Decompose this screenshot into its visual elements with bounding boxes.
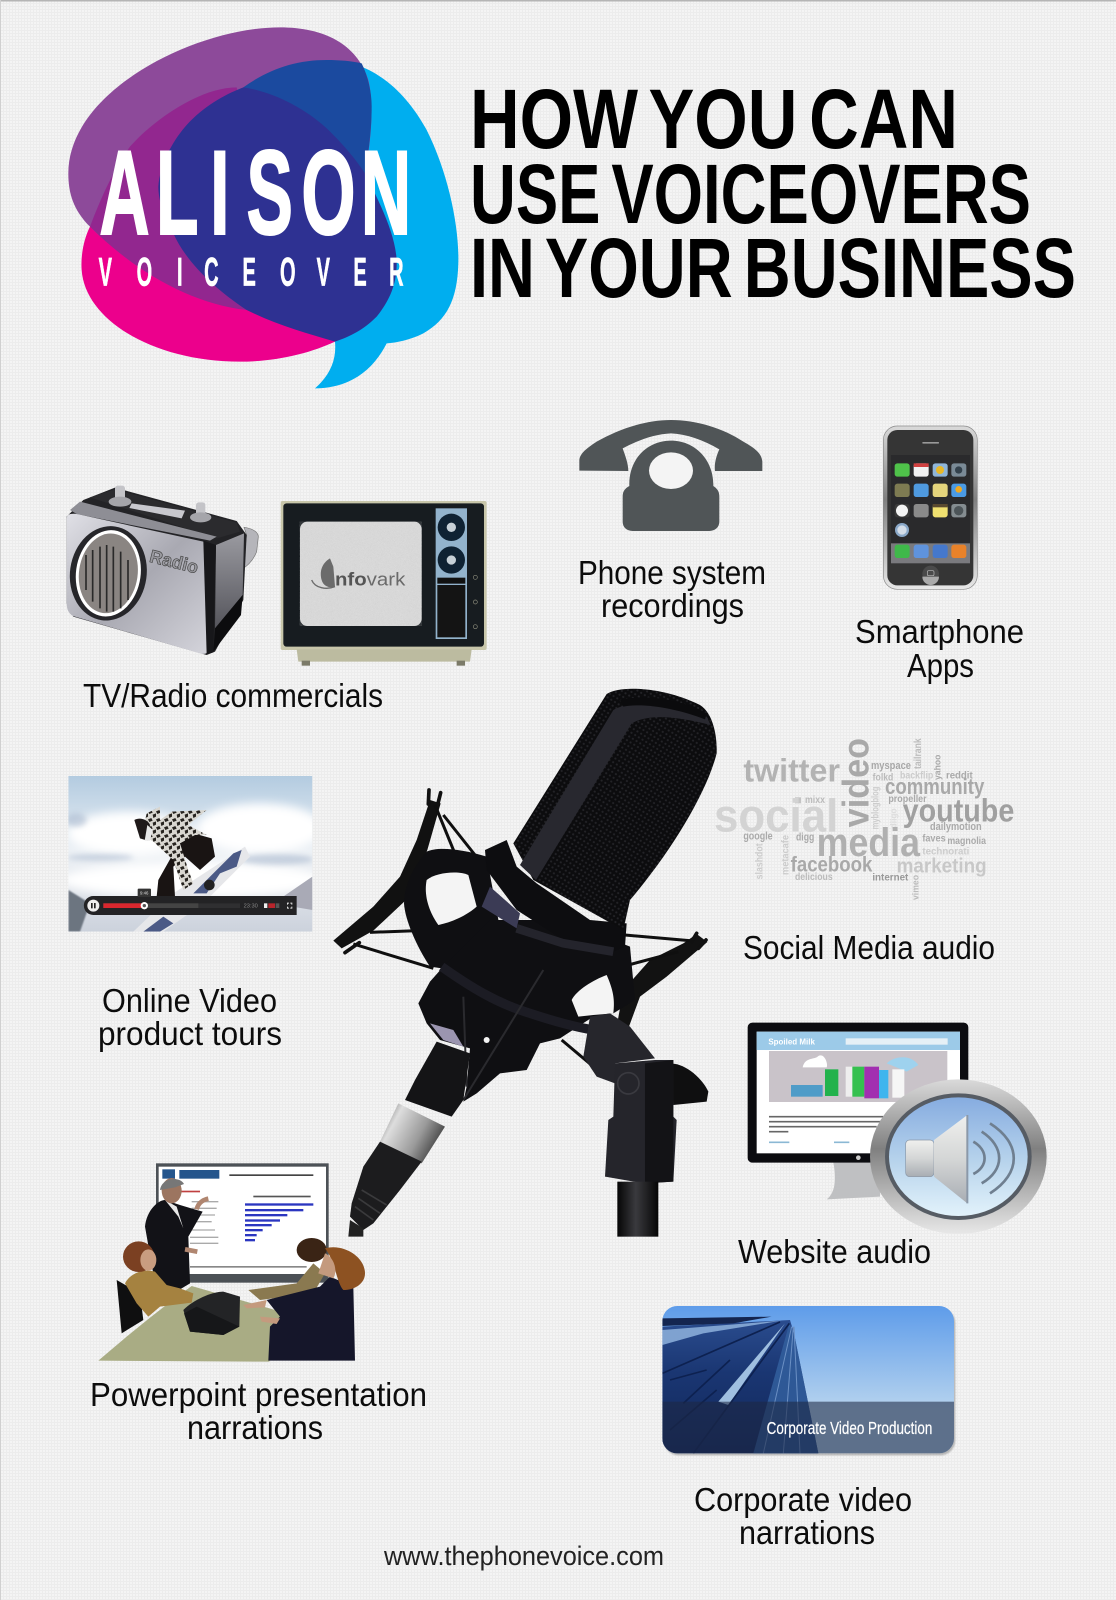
word cloud: social media terms: delicious [795, 872, 833, 883]
word cloud: social media terms: marketing [897, 855, 987, 878]
word cloud: social media terms: propeller [888, 794, 927, 805]
cyan bubble [273, 60, 458, 388]
logo wordmark ALISON: ALISON [99, 125, 411, 260]
word cloud: social media terms [714, 738, 1014, 900]
monitor: Spoiled Milk [768, 1037, 815, 1046]
image: website on monitor [748, 1023, 1047, 1234]
blue overlap [243, 60, 372, 173]
label: Social Media audio: Social Media audio [743, 929, 995, 966]
website address: www.thephonevoice.com [383, 1541, 664, 1571]
word cloud: social media terms: magnolia [947, 836, 986, 847]
word cloud: social media terms: video [834, 738, 876, 827]
word cloud: social media terms: yahoo [933, 754, 943, 780]
word cloud: social media terms: backflip [900, 770, 933, 781]
label: Powerpoint presentation narrations [90, 1376, 427, 1446]
word cloud: social media terms: youtube [903, 793, 1014, 829]
word cloud: social media terms: facebook [791, 853, 872, 877]
label: Smartphone Apps [855, 613, 1024, 684]
stand clamp and pole [583, 1013, 708, 1237]
label: Corporate video narrations: Corporate video [694, 1481, 912, 1518]
icon: radio [64, 486, 258, 655]
word cloud: social media terms: myblogblog [870, 787, 881, 829]
purple blob [68, 27, 372, 310]
icon: radio and television [64, 486, 487, 666]
xlr connector [348, 1042, 470, 1237]
word cloud: social media terms: technorati [922, 846, 970, 857]
word cloud: social media terms: media [817, 821, 921, 865]
word cloud: social media terms: vimeo [910, 875, 920, 900]
microphone grille [513, 689, 717, 930]
word cloud: social media terms: community [885, 774, 985, 799]
word cloud: social media terms: faves [922, 834, 946, 845]
word cloud: social media terms: twitter [743, 752, 840, 789]
word cloud: social media terms: dailymotion [930, 821, 982, 833]
word cloud: social media terms: digg [796, 831, 814, 843]
shock mount [333, 790, 707, 1067]
label: TV/Radio commercials: TV/Radio commercials [83, 677, 383, 714]
icon: smartphone [883, 426, 977, 589]
label: Phone system recordings: recordings [601, 587, 744, 624]
label: Powerpoint presentation narrations: Powerpoint presentation [90, 1376, 427, 1413]
word cloud: social media terms: folkd [873, 773, 893, 784]
image: business presentation meeting [98, 1163, 365, 1363]
icon: television [281, 501, 487, 666]
presenter [145, 1178, 208, 1289]
label: Website audio: Website audio [738, 1233, 931, 1270]
title: HOW YOU CAN [470, 72, 958, 166]
word cloud: social media terms: social [714, 790, 838, 842]
image: studio microphone [333, 689, 717, 1237]
image: online video player: 23:30 [244, 904, 258, 910]
word cloud: social media terms: slashdot [755, 843, 766, 879]
icon: radio: Radio [148, 546, 200, 577]
dark purple overlap [90, 87, 260, 310]
word cloud: social media terms: diigo [889, 808, 899, 828]
word cloud: social media terms: mixx [805, 795, 825, 806]
image: corporate video production banner [662, 1306, 955, 1455]
label: Online Video product tours: Online Video [102, 982, 277, 1019]
label: Phone system recordings [578, 554, 766, 624]
word cloud: social media terms: reddit [946, 770, 973, 781]
label: Corporate video narrations [694, 1481, 912, 1551]
monitor [748, 1023, 968, 1199]
label: Smartphone Apps: Smartphone [855, 613, 1024, 650]
label: Phone system recordings: Phone system [578, 554, 766, 591]
logo: Alison Voiceover speech bubble [68, 27, 458, 388]
word cloud: social media terms: tailrank [913, 738, 924, 769]
word cloud: social media terms: google [743, 830, 773, 842]
logo wordmark VOICEOVER: VOICEOVER [99, 249, 404, 294]
presentation screen [156, 1163, 329, 1283]
navy overlap [158, 87, 397, 342]
image: online video player [60, 776, 327, 932]
microphone body [418, 840, 635, 1102]
icon: rotary telephone [579, 420, 762, 531]
image: corporate video production banner: Corporate Video Production [767, 1418, 932, 1438]
icon: television: nfo [335, 568, 367, 589]
word cloud: social media terms: internet [872, 873, 909, 884]
pink blob [81, 200, 335, 362]
icon: speaker button [870, 1079, 1047, 1234]
seated people and table [98, 1238, 365, 1363]
label: Online Video product tours [98, 982, 282, 1052]
title [470, 72, 1076, 315]
word cloud: social media terms: metacafe [780, 835, 791, 875]
icon: television: vark [367, 568, 406, 589]
word cloud: social media terms: myspace [871, 760, 911, 772]
label: Smartphone Apps: Apps [907, 647, 974, 684]
label: Powerpoint presentation narrations: narrations [187, 1409, 323, 1446]
label: Corporate video narrations: narrations [739, 1514, 875, 1551]
image: online video player: 9:46 [140, 890, 149, 895]
label: Online Video product tours: product tours [98, 1015, 282, 1052]
